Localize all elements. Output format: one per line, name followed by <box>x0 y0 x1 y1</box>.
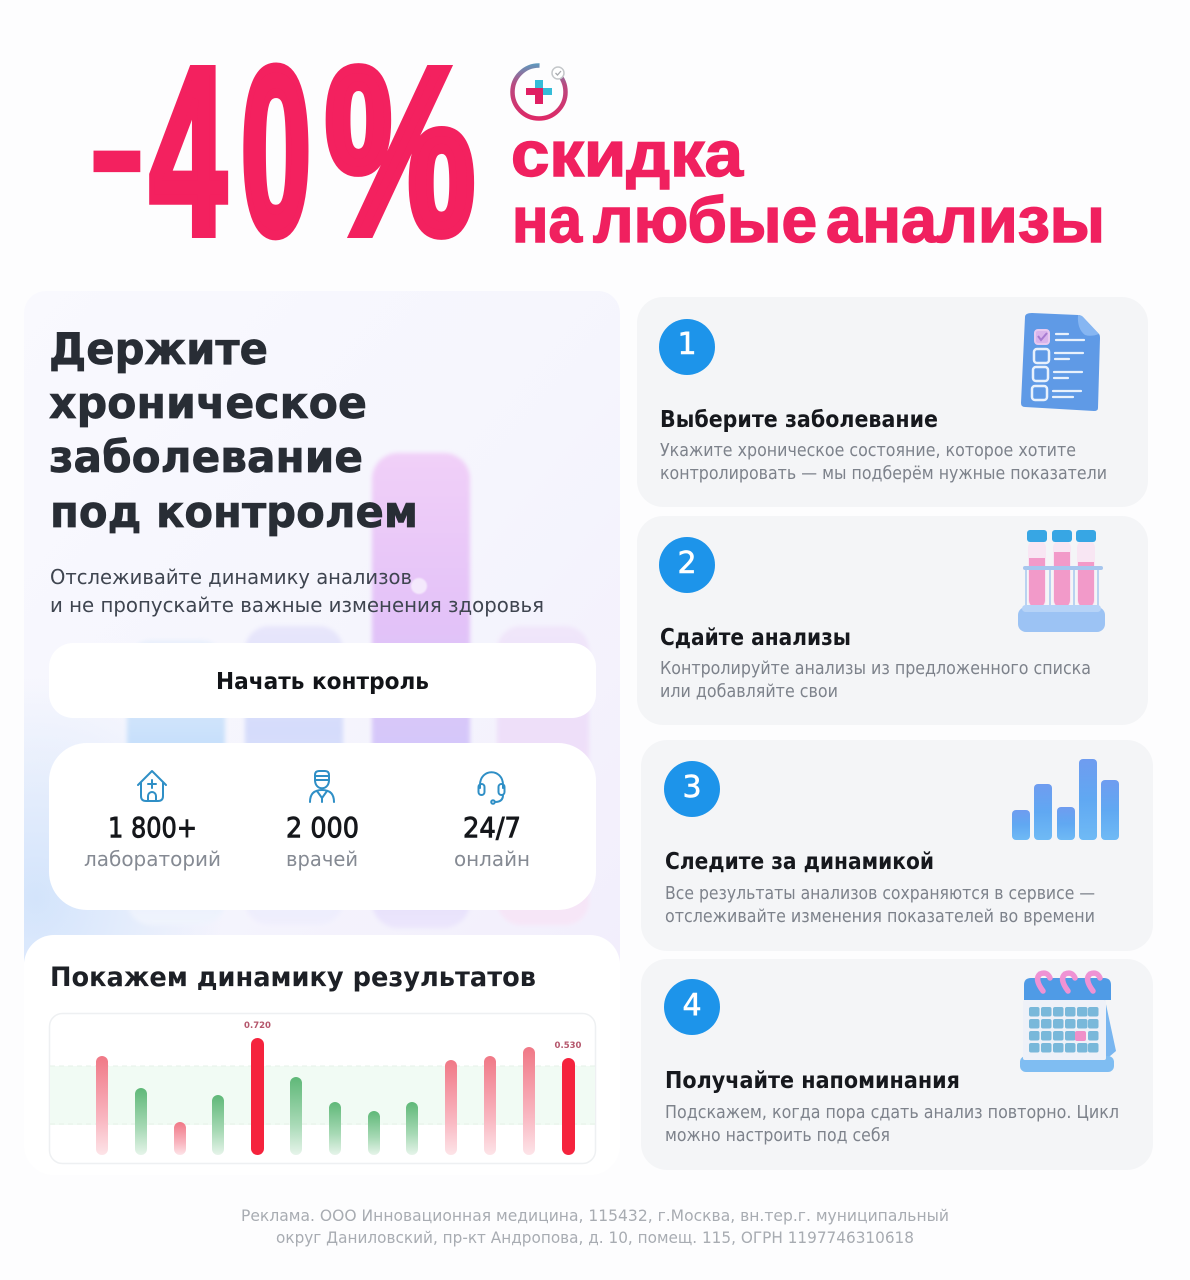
icon: brand logo <box>502 55 576 129</box>
icon: test tubes <box>1018 530 1105 632</box>
panel: step 2 <box>637 516 1148 725</box>
headline: под контролем <box>50 487 418 538</box>
icon: clinic <box>138 771 166 801</box>
icon: headset <box>478 772 504 804</box>
discount figure: 4 <box>150 19 226 284</box>
stat: doctors: врачей <box>286 847 358 871</box>
chart heading: Покажем динамику результатов <box>50 962 536 993</box>
discount figure: 0 <box>241 19 311 284</box>
step description: Подскажем, когда пора сдать анализ повторно. Цикл <box>665 1103 1119 1123</box>
step description <box>665 1103 1119 1146</box>
stat: online: 24/7 <box>463 811 521 844</box>
step description: Все результаты анализов сохраняются в сервисе — <box>665 884 1095 904</box>
step description <box>665 884 1095 927</box>
stat: laboratories <box>84 811 221 871</box>
icon: bar chart <box>1012 759 1119 840</box>
heading: discount word: скидка <box>511 118 743 190</box>
button: Начать контроль <box>216 669 429 695</box>
icon: doctor <box>310 771 334 802</box>
panel: step 4 <box>641 959 1153 1170</box>
step description: контролировать — мы подберём нужные показатели <box>660 464 1107 484</box>
panel: left promo <box>24 291 620 981</box>
value label: 0.720 <box>244 1021 271 1031</box>
step title: Сдайте анализы <box>660 625 851 651</box>
headline: хроническое <box>49 378 367 429</box>
icon: calendar <box>1020 973 1116 1072</box>
stat: online: онлайн <box>454 847 530 871</box>
footer disclaimer: округ Даниловский, пр-кт Андропова, д. 10, помещ. 115, ОГРН 1197746310618 <box>276 1228 914 1247</box>
step title: Получайте напоминания <box>665 1068 960 1094</box>
headline <box>49 324 418 538</box>
step number: 3 <box>682 770 702 805</box>
button <box>49 643 596 718</box>
icon: checklist <box>1021 313 1100 411</box>
stat: doctors <box>286 811 359 871</box>
subheading: и не пропускайте важные изменения здоровья <box>50 593 544 617</box>
panel: results chart <box>24 935 620 1175</box>
heading: on any tests: любые <box>593 184 817 256</box>
step description: отслеживайте изменения показателей во времени <box>665 907 1095 927</box>
panel: stats <box>49 743 596 910</box>
step description <box>660 659 1091 702</box>
discount figure <box>87 19 475 284</box>
step number <box>664 761 720 817</box>
stat: laboratories: 1 800+ <box>108 811 197 844</box>
panel: step 1 <box>637 297 1148 507</box>
stat: online <box>454 811 530 871</box>
stat: doctors: 2 000 <box>286 811 359 844</box>
footer disclaimer: Реклама. ООО Инновационная медицина, 115432, г.Москва, вн.тер.г. муниципальный <box>241 1206 949 1225</box>
subheading: Отслеживайте динамику анализов <box>50 565 412 589</box>
step number: 4 <box>682 988 702 1023</box>
step description: можно настроить под себя <box>665 1126 890 1146</box>
step description: Укажите хроническое состояние, которое хотите <box>660 441 1076 461</box>
step title: Следите за динамикой <box>665 849 934 875</box>
value label: 0.530 <box>555 1041 582 1051</box>
step description: Контролируйте анализы из предложенного списка <box>660 659 1091 679</box>
heading: on any tests: анализы <box>826 184 1105 256</box>
step number: 2 <box>677 546 697 581</box>
discount figure: - <box>87 51 147 243</box>
subheading <box>50 565 544 617</box>
heading: on any tests: на <box>512 184 582 256</box>
step description <box>660 441 1107 484</box>
stat: laboratories: лабораторий <box>84 847 221 871</box>
step number <box>659 319 715 375</box>
background glass tubes <box>127 453 589 928</box>
headline: Держите <box>49 324 268 375</box>
discount figure: % <box>325 19 475 284</box>
headline: заболевание <box>49 432 363 483</box>
panel: step 3 <box>641 740 1153 951</box>
step number: 1 <box>677 327 697 362</box>
step description: или добавляйте свои <box>660 682 838 702</box>
bar chart <box>50 1014 596 1164</box>
step title: Выберите заболевание <box>660 407 938 433</box>
step number <box>664 979 720 1035</box>
step number <box>659 537 715 593</box>
footer disclaimer <box>241 1206 949 1247</box>
